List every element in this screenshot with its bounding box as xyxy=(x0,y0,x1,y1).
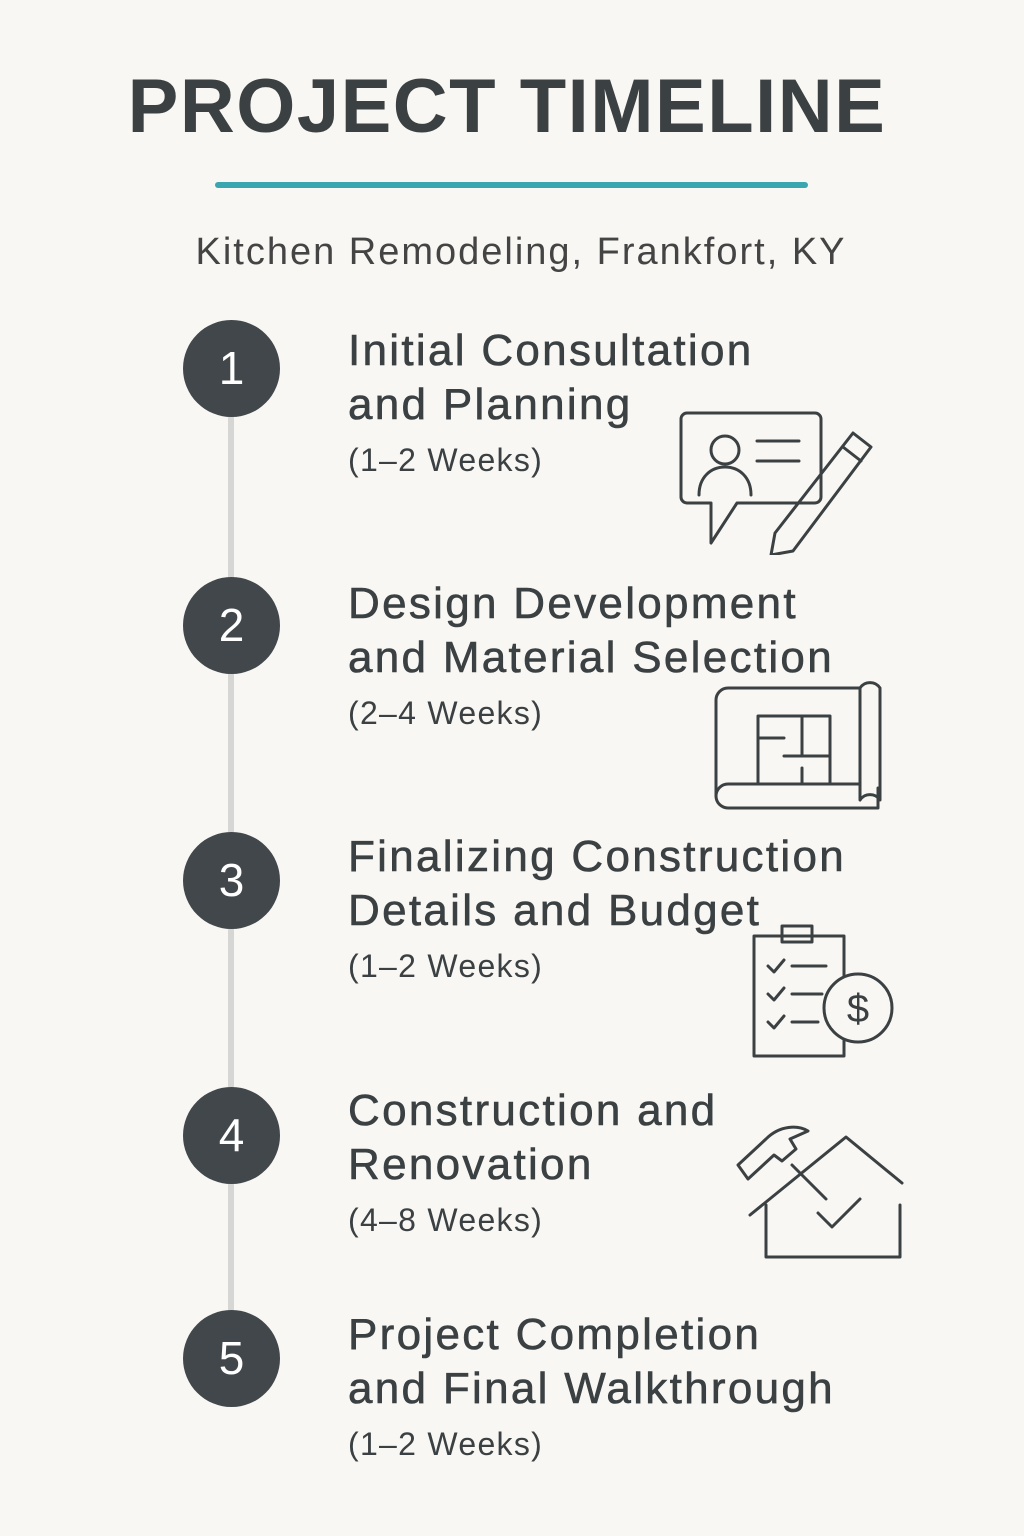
subtitle: Kitchen Remodeling, Frankfort, KY xyxy=(195,231,847,273)
step 5 text: Project Completion xyxy=(348,1310,761,1359)
teal divider xyxy=(215,182,808,188)
step 2 text: and Material Selection xyxy=(348,633,834,682)
step 5 text xyxy=(348,1310,835,1462)
step 3 badge: 3 xyxy=(219,854,244,906)
step 1 text: (1–2 Weeks) xyxy=(348,442,543,478)
step 1 text: Initial Consultation xyxy=(348,326,754,375)
step 4 badge xyxy=(183,1087,280,1184)
step 4 badge: 4 xyxy=(219,1109,244,1161)
step 2 text: Design Development xyxy=(348,579,798,628)
step 2 text xyxy=(348,579,834,731)
step 3 text: (1–2 Weeks) xyxy=(348,948,543,984)
step 5 text: and Final Walkthrough xyxy=(348,1364,835,1413)
step 3 text xyxy=(348,832,846,984)
step 4 text: Construction and xyxy=(348,1086,717,1135)
step 1 badge: 1 xyxy=(219,342,244,394)
title: PROJECT TIMELINE xyxy=(128,64,886,149)
step 2 text: (2–4 Weeks) xyxy=(348,695,543,731)
icon: hammer house xyxy=(736,1126,904,1258)
icon: blueprint xyxy=(714,681,882,810)
step 4 text: Renovation xyxy=(348,1140,594,1189)
step 4 text xyxy=(348,1086,717,1238)
step 2 badge: 2 xyxy=(219,599,244,651)
step 5 badge: 5 xyxy=(219,1332,244,1384)
step 3 text: Finalizing Construction xyxy=(348,832,846,881)
timeline line xyxy=(228,400,234,1340)
icon: checklist budget xyxy=(752,924,894,1058)
step 1 text: and Planning xyxy=(348,380,632,429)
icon: checklist budget: $ xyxy=(847,987,869,1031)
step 2 badge xyxy=(183,577,280,674)
step 4 text: (4–8 Weeks) xyxy=(348,1202,543,1238)
step 5 badge xyxy=(183,1310,280,1407)
step 3 text: Details and Budget xyxy=(348,886,761,935)
step 1 text xyxy=(348,326,754,478)
step 3 badge xyxy=(183,832,280,929)
step 1 badge xyxy=(183,320,280,417)
step 5 text: (1–2 Weeks) xyxy=(348,1426,543,1462)
icon: consultation xyxy=(680,412,873,555)
